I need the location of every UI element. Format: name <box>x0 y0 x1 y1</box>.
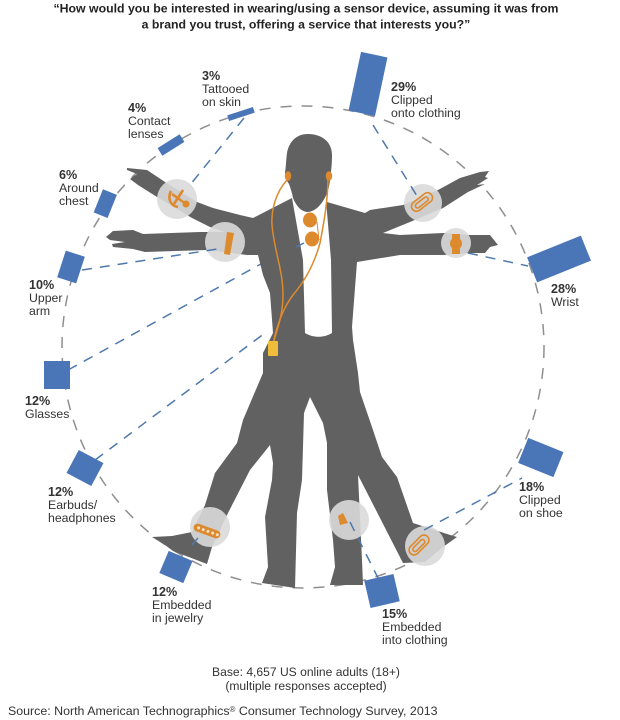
label: 15%: Embedded <box>382 620 442 634</box>
label: 4% <box>128 101 171 141</box>
label: 18%: on shoe <box>519 506 563 520</box>
label: 15%: 15% <box>382 607 407 621</box>
bar: wrist <box>527 236 591 282</box>
label: 28%: Wrist <box>551 295 579 309</box>
label: 29% <box>391 80 461 120</box>
label: 10%: 10% <box>29 278 54 292</box>
white shirt front <box>292 198 332 337</box>
label: 6%: chest <box>59 194 89 208</box>
label: 3% <box>202 69 249 109</box>
label: 29%: Clipped <box>391 93 433 107</box>
dashed circle <box>62 106 544 588</box>
base note: Base: 4,657 US online adults (18+) <box>212 665 400 679</box>
label: 12% earbuds <box>48 485 116 525</box>
icon: sunglasses <box>303 212 319 246</box>
icon: wrist watch <box>450 234 462 254</box>
label: 12% jewelry: 12% <box>152 585 177 599</box>
label: 4%: lenses <box>128 127 164 141</box>
label: 10%: Upper <box>29 291 62 305</box>
title <box>54 2 559 32</box>
bar: contact lenses <box>158 134 184 156</box>
label: 12% earbuds: Earbuds/ <box>48 498 98 512</box>
label: 18%: Clipped <box>519 493 561 507</box>
label: 6%: Around <box>59 181 99 195</box>
label: 12% glasses <box>25 394 69 421</box>
label: 12% earbuds: 12% <box>48 485 73 499</box>
icon circles <box>157 179 471 566</box>
label: 28% <box>551 282 579 309</box>
label: 4%: 4% <box>128 101 146 115</box>
icon: music player <box>268 341 278 356</box>
icon: earbuds and wires <box>272 172 332 344</box>
icon: anchor <box>169 190 188 207</box>
icon: clip on arm <box>409 191 435 213</box>
bar: clipped onto clothing <box>349 52 387 116</box>
bar: glasses <box>44 361 70 389</box>
bar: embedded in jewelry <box>159 551 193 583</box>
label: 18%: 18% <box>519 480 544 494</box>
label: 18% <box>519 480 563 520</box>
label: 6% <box>59 168 99 208</box>
source: Consumer Technology Survey, 2013 <box>235 704 438 718</box>
head <box>285 134 332 212</box>
label: 3%: 3% <box>202 69 220 83</box>
label: 12% jewelry <box>152 585 212 625</box>
source: ® <box>230 705 236 714</box>
bar: around chest <box>94 189 117 218</box>
label: 12% jewelry: in jewelry <box>152 611 204 625</box>
label: 15%: into clothing <box>382 633 448 647</box>
label: 28%: 28% <box>551 282 576 296</box>
connector line: glasses across shirt <box>296 243 304 247</box>
label: 29%: onto clothing <box>391 106 461 120</box>
label: 12% jewelry: Embedded <box>152 598 212 612</box>
icon: jewelry bracelet <box>192 522 222 540</box>
title: a brand you trust, offering a service that interests you?” <box>142 18 470 32</box>
dashed connector lines <box>82 118 528 578</box>
base note: (multiple responses accepted) <box>225 679 387 693</box>
bar: embedded into clothing <box>364 574 400 608</box>
bar: clipped on shoe <box>518 438 563 477</box>
label: 6%: 6% <box>59 168 77 182</box>
label: 15% <box>382 607 448 647</box>
title: “How would you be interested in wearing/using a sensor device, assuming it was from <box>54 2 559 16</box>
label: 10% <box>29 278 62 318</box>
bar: tattooed on skin <box>227 107 255 121</box>
source: Source: North American Technographics <box>8 704 230 718</box>
icon: clip on shoe <box>407 533 431 557</box>
bar: upper arm <box>57 251 85 283</box>
label: 3%: Tattooed <box>202 82 249 96</box>
label: 12% glasses: Glasses <box>25 407 69 421</box>
base note <box>212 665 400 693</box>
icon: armband <box>224 232 234 255</box>
label: 3%: on skin <box>202 95 241 109</box>
label: 4%: Contact <box>128 114 171 128</box>
label: 12% earbuds: headphones <box>48 511 116 525</box>
connector line: glasses <box>68 248 290 370</box>
label: 29%: 29% <box>391 80 416 94</box>
connector line: earbuds <box>95 333 265 460</box>
bar: earbuds <box>67 450 103 486</box>
icon: clothing tag <box>338 513 348 525</box>
label: 12% glasses: 12% <box>25 394 50 408</box>
label: 10%: arm <box>29 304 50 318</box>
human silhouette <box>106 168 498 588</box>
